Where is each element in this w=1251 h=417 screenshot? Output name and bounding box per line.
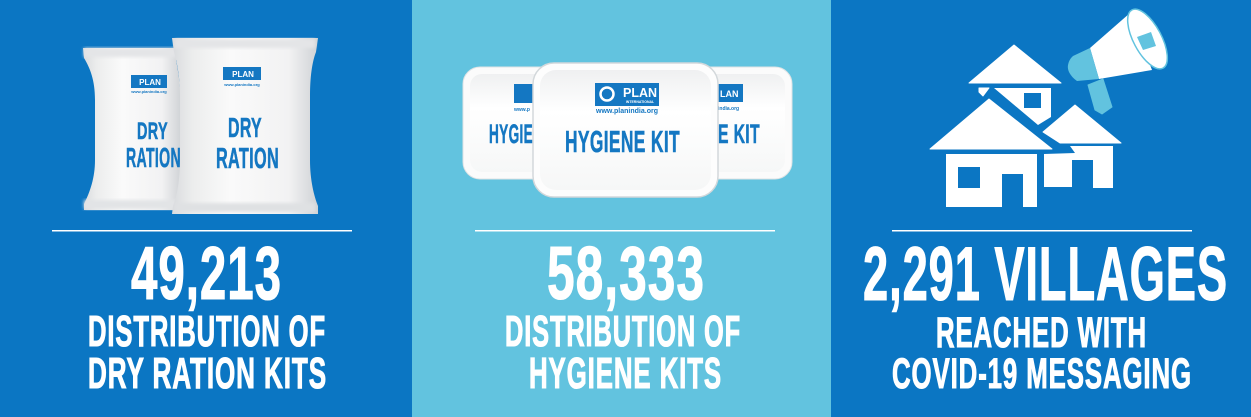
icon: back dry ration bag: www.planindia.org [130,89,167,94]
icon: left hygiene tray [463,67,563,179]
icon: front hygiene tray: www.planindia.org [595,108,658,115]
panel: villages [831,0,1251,417]
icon: megaphone [1068,3,1175,114]
stat: 58,333: 58,333 [547,231,705,315]
icon: front hygiene tray: PLAN [623,85,657,100]
icon: back dry ration bag: RATION [126,142,181,173]
icon: right hygiene tray: india.org [718,106,739,112]
icon: right hygiene tray: LAN [720,89,738,99]
icon: front hygiene tray: HYGIENE KIT [565,124,680,159]
icon: houses [930,45,1121,207]
icon: back dry ration bag: DRY [137,118,168,145]
icon: front dry ration bag: www.planindia.org [223,82,260,87]
icon: right hygiene tray: E KIT [718,119,760,149]
icon: left hygiene tray: HYGIE [489,119,533,149]
label: distribution of hygiene kits [505,307,741,398]
icon: left hygiene tray: www.p [513,107,530,113]
icon: back dry ration bag [83,48,181,210]
panel: dry ration [0,0,412,417]
icon: front hygiene tray [533,63,718,197]
label: distribution of dry ration kits: DRY RATION KITS [88,349,327,398]
icon: right hygiene tray [690,67,792,179]
icon: front dry ration bag: DRY [228,112,262,143]
icon: front dry ration bag: RATION [216,143,279,175]
label: distribution of dry ration kits [88,307,327,398]
panel: hygiene kits [412,0,831,417]
icon: front dry ration bag: PLAN [232,70,254,79]
icon: front dry ration bag [172,38,318,214]
label: distribution of hygiene kits: DISTRIBUTION OF [505,307,741,356]
icon: back dry ration bag: PLAN [139,78,161,87]
label: reached with covid-19 messaging [892,309,1192,398]
label: distribution of dry ration kits: DISTRIBUTION OF [88,307,326,356]
label: distribution of hygiene kits: HYGIENE KITS [529,349,722,398]
stat: 49,213: 49,213 [131,231,282,315]
icon: front hygiene tray: INTERNATIONAL [626,100,655,104]
